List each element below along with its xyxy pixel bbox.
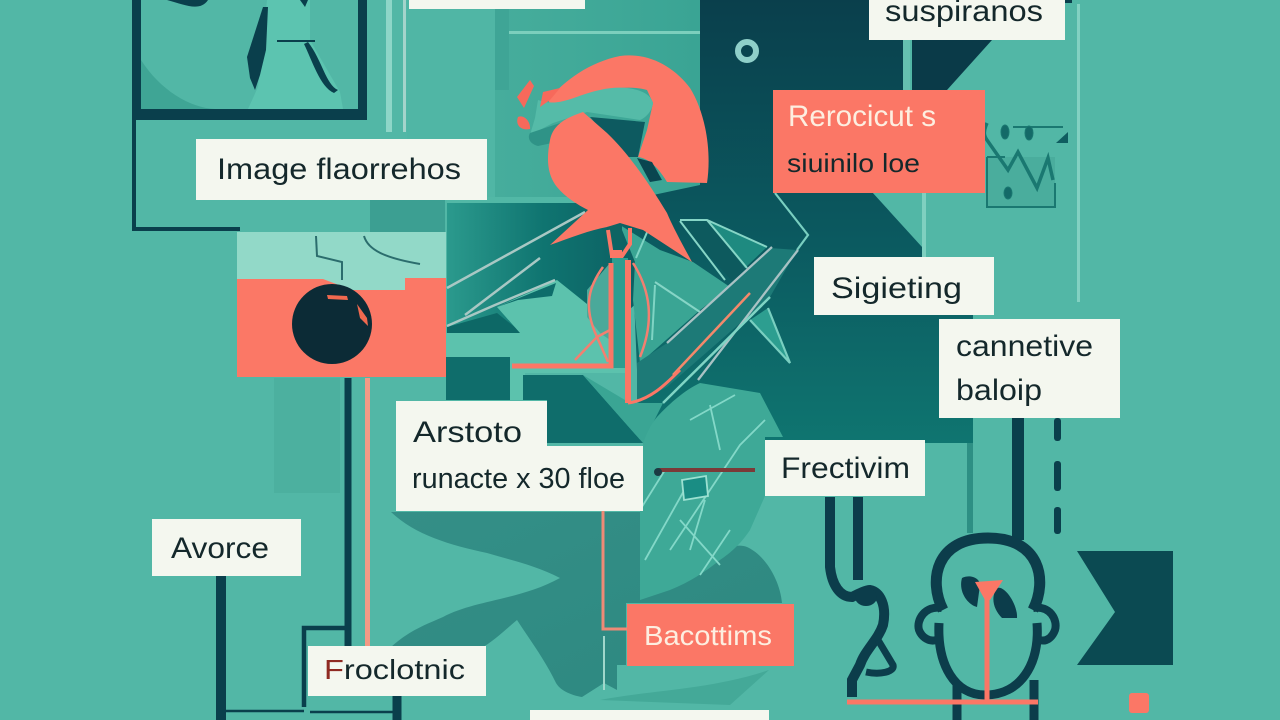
label: cannetive: cannetive [956,330,1093,363]
illustration: dark shadow shape [274,378,782,705]
label: Avorce [152,519,301,576]
icon: human head outline [847,538,1056,720]
panel: coral block with black sphere [237,232,446,377]
icon: small waveform gauge [984,123,1068,207]
panel: upper centre lighter block [407,0,703,200]
frame line below picture [134,120,240,229]
connector: pale vertical right [922,0,1080,302]
label: Sigieting [814,257,994,315]
icon: dark notched flag [1077,551,1173,665]
panel: left dark wedge [446,197,643,443]
label: Froclotnic [308,646,486,696]
label: bottom centre [530,710,769,720]
label: Froclotnic: Froclotnic [324,654,465,685]
label: coral Reprocess [773,90,985,193]
label: Sigieting: Sigieting [831,272,962,305]
label: Frectivim [765,440,925,496]
label: Arstoto: runacte x 30 floe [412,463,625,495]
icon: ring [738,42,756,60]
connector: red pointer [654,468,755,476]
label: Image [196,139,487,200]
label: Frectivim: Frectivim [781,452,910,485]
label: coral Reprocess: Rerocicut s [788,100,936,133]
label: Avorce: Avorce [171,532,269,565]
icon: twisted pipes [830,497,893,697]
label: cannetive [939,319,1120,418]
label: coral Bacotims: Bacottims [644,620,772,651]
illustration: coral bird [512,55,709,403]
connector: lines to head [967,418,1061,540]
label: Arstoto: Arstoto [413,416,522,449]
illustration: geometric wings and lines [447,193,808,443]
vertical pale lines [370,0,445,232]
connector: dark lines lower left [221,378,397,720]
label: suspiranos [869,0,1065,40]
label: coral Bacotims [627,604,794,666]
connector: thin coral lines [365,378,627,690]
label: coral Reprocess: siuinilo loe [787,148,920,178]
label: Image: Image flaorrehos [217,153,461,186]
icon: coral square [1129,693,1149,713]
panel: dark backdrop [630,0,992,443]
label: Arstoto [396,401,643,511]
label: cannetive: baloip [956,374,1042,407]
panel: top left framed picture [132,0,367,120]
label: top centre [409,0,585,9]
illustration: leaf [640,383,783,600]
